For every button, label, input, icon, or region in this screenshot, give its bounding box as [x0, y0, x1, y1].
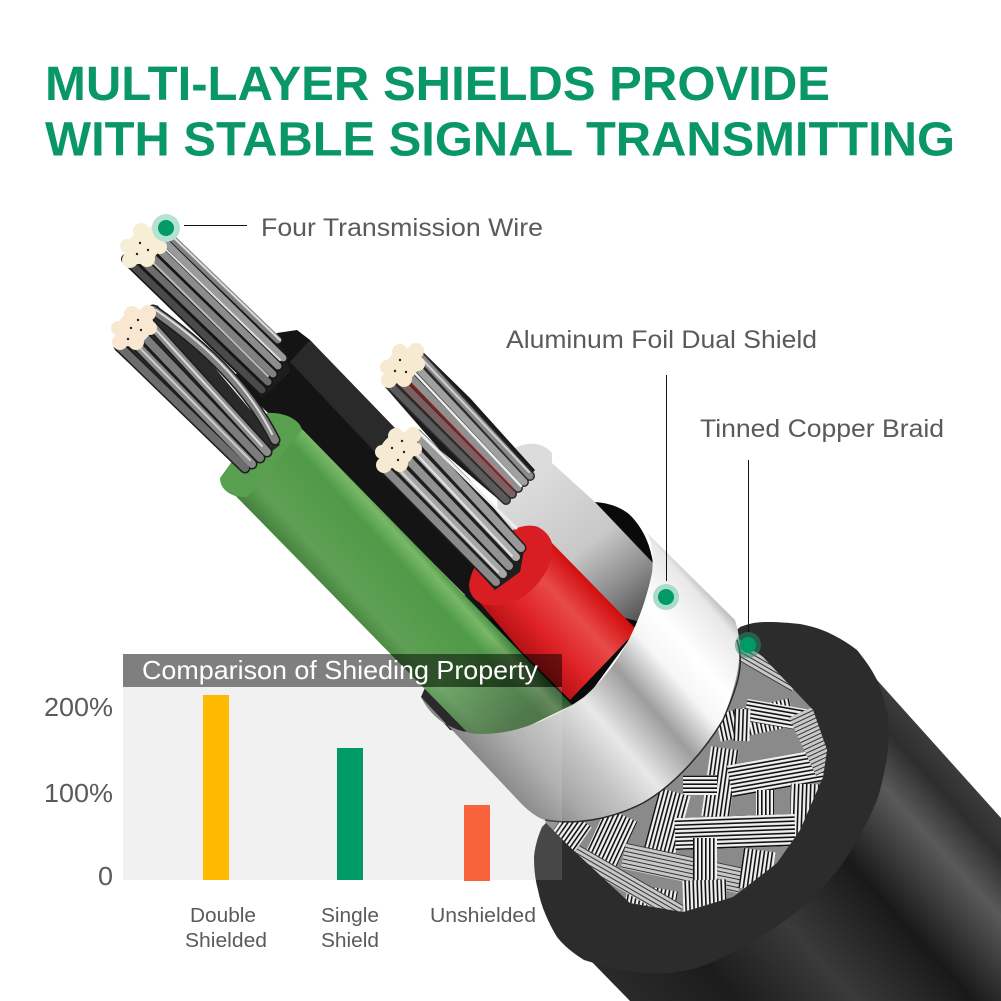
- title: [45, 58, 955, 166]
- callout: four transmission wire: [152, 214, 543, 242]
- front transmission wire bundle: [378, 430, 525, 590]
- x axis labels: Unshielded: [430, 905, 536, 927]
- bar: double shielded: [203, 695, 229, 880]
- green wire: [220, 413, 572, 735]
- aluminium foil shield: [421, 533, 740, 822]
- tinned copper braid: [545, 640, 827, 912]
- copper strand cap: front: [372, 424, 424, 476]
- callout: aluminum foil dual shield: [506, 326, 817, 610]
- cable illustration: [108, 223, 1001, 1001]
- gray wire: [495, 444, 653, 622]
- title: MULTI-LAYER SHIELDS PROVIDE: [45, 58, 830, 111]
- inner cavity of shield: [421, 502, 653, 735]
- black wire: [232, 330, 520, 620]
- bar chart: [203, 695, 490, 881]
- bar: single shield: [337, 748, 363, 880]
- callout: tinned copper braid: [700, 415, 944, 658]
- x axis labels: [185, 905, 536, 952]
- y axis labels: 100%: [44, 778, 113, 808]
- four-strand bundle: rear: [385, 352, 535, 505]
- x axis labels: Single: [321, 905, 379, 927]
- callout: four transmission wire: Four Transmission Wire: [261, 214, 543, 242]
- outer black jacket: [590, 660, 1001, 1001]
- chart panel background: [123, 687, 562, 880]
- x axis labels: Shield: [321, 930, 379, 952]
- x axis labels: Shielded: [185, 930, 267, 952]
- translucent panel overlay on cable: [123, 687, 562, 880]
- left transmission wire bundle: [115, 305, 280, 472]
- title: WITH STABLE SIGNAL TRANSMITTING: [45, 114, 955, 166]
- top transmission wire bundle: [122, 232, 290, 398]
- callout: aluminum foil dual shield: Aluminum Foil Dual Shield: [506, 326, 817, 354]
- callout: tinned copper braid: Tinned Copper Braid: [700, 415, 944, 443]
- copper strand cap: left: [108, 302, 160, 354]
- shield rim: [545, 640, 740, 822]
- bar: unshielded: [464, 805, 490, 881]
- x axis labels: Double: [190, 905, 256, 927]
- red wire: [469, 526, 637, 700]
- copper strand cap: rear: [377, 342, 427, 390]
- y axis labels: [44, 692, 113, 891]
- chart heading bar: Comparison of Shieding Property: [142, 655, 538, 685]
- jacket end face: [534, 622, 889, 974]
- y axis labels: 200%: [44, 692, 113, 722]
- copper strand cap: top: [118, 223, 168, 271]
- wire end caps: [108, 223, 427, 476]
- y axis labels: 0: [98, 861, 113, 891]
